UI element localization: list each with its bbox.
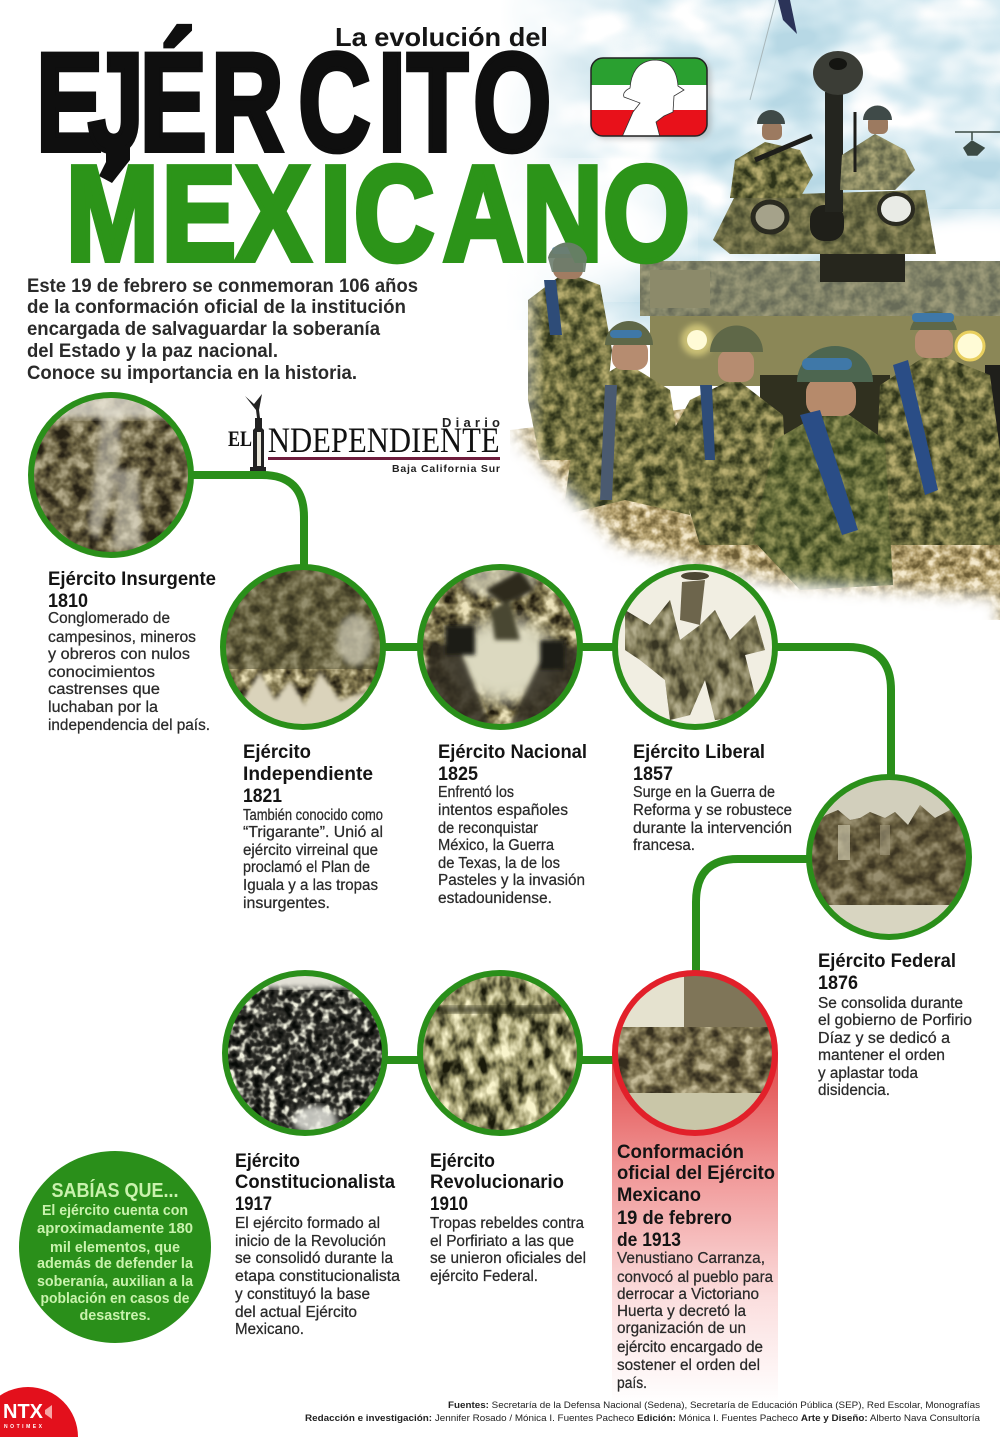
text: Ejército Liberal: Reforma y se robustece: [633, 802, 792, 819]
text: Ejército Federal: 1876: [818, 973, 858, 994]
text: Ejército Liberal: [633, 742, 792, 854]
ground: [510, 400, 1000, 620]
callout: Sabías que: [19, 1151, 211, 1343]
text: Conformación oficial: [617, 1142, 775, 1392]
text: Ejército Constitucionalista: del actual Ejército: [235, 1304, 357, 1321]
text: Ejército Revolucionario: Tropas rebeldes contra: [430, 1215, 584, 1232]
logo: El Independiente: Baja California Sur: [392, 463, 500, 475]
text: Ejército Nacional: México, la Guerra: [438, 837, 554, 854]
text: Ejército Federal: Díaz y se dedicó a: [818, 1030, 950, 1047]
text: Conformación oficial: convocó al pueblo para: [617, 1269, 773, 1286]
photo circle: Ejército Revolucionario: [417, 970, 583, 1136]
text: Ejército Federal: disidencia.: [818, 1082, 890, 1099]
text: Conformación oficial: ejército encargado de: [617, 1339, 763, 1356]
text: Ejército Independiente: También conocido como: [243, 807, 383, 824]
intro text: Este 19 de febrero se conmemoran 106 años: [27, 276, 418, 297]
text: Ejército Revolucionario: 1910: [430, 1194, 468, 1215]
text: Ejército Constitucionalista: El ejército formado al: [235, 1215, 380, 1232]
callout: Sabías que: aproximadamente 180: [37, 1220, 193, 1237]
text: Ejército Revolucionario: el Porfiriato a las que: [430, 1233, 574, 1250]
text: Ejército Constitucionalista: Mexicano.: [235, 1321, 304, 1338]
logo: El Independiente: INDEPENDIENTE: [253, 421, 500, 461]
text: Ejército Liberal: durante la intervención: [633, 820, 792, 837]
intro text: del Estado y la paz nacional.: [27, 341, 278, 362]
text: Ejército Insurgente: independencia del país.: [48, 717, 210, 734]
text: Ejército Liberal: Surge en la Guerra de: [633, 784, 775, 801]
red highlight panel: [612, 1053, 778, 1403]
text: Ejército Federal: mantener el orden: [818, 1047, 945, 1064]
text: Ejército Nacional: 1825: [438, 764, 478, 785]
logo: El Independiente: Diario: [442, 415, 500, 430]
text: Ejército Insurgente: luchaban por la: [48, 699, 158, 716]
text: Ejército Constitucionalista: Constitucionalista: [235, 1172, 395, 1193]
text: Ejército Independiente: 1821: [243, 786, 282, 807]
photo circle: Conformación oficial: [612, 970, 778, 1136]
intro text: encargada de salvaguardar la soberanía: [27, 319, 380, 340]
text: Ejército Insurgente: campesinos, mineros: [48, 629, 196, 646]
tank: [640, 51, 1000, 455]
callout: Sabías que: desastres.: [80, 1307, 150, 1324]
text: Ejército Constitucionalista: Ejército: [235, 1151, 300, 1172]
photo circle: Ejército Constitucionalista: [222, 970, 388, 1136]
text: Conformación oficial: organización de un: [617, 1320, 746, 1337]
text: Conformación oficial: de 1913: [617, 1230, 681, 1251]
text: Ejército Nacional: estadounidense.: [438, 890, 552, 907]
text: Conformación oficial: Venustiano Carranza,: [617, 1250, 765, 1267]
text: Ejército Nacional: de reconquistar: [438, 820, 538, 837]
text: Ejército Constitucionalista: 1917: [235, 1194, 272, 1215]
text: Ejército Nacional: Pasteles y la invasión: [438, 872, 585, 889]
text: Conformación oficial: derrocar a Victoriano: [617, 1286, 759, 1303]
text: Conformación oficial: Huerta y decretó la: [617, 1303, 746, 1320]
credits: Fuentes: Secretaría de la Defensa Nacional (Sedena), Secretaría de Educación Pública (SEP), Red Escolar, Monografías: [448, 1400, 980, 1411]
text: Ejército Insurgente: Ejército Insurgente: [48, 569, 216, 590]
callout: Sabías que: población en casos de: [40, 1290, 190, 1307]
text: Ejército Constitucionalista: se consolidó durante la: [235, 1250, 393, 1267]
flag fragment: [750, 0, 776, 100]
logo: NTX: NTX: [3, 1401, 44, 1423]
photo: soldiers and tank: [490, 0, 1000, 650]
text: Ejército Independiente: Independiente: [243, 764, 373, 785]
rifles: [800, 410, 858, 535]
photo circle: Ejército Insurgente: [28, 392, 194, 558]
text: Ejército Nacional: Ejército Nacional: [438, 742, 587, 763]
text: Ejército Nacional: de Texas, la de los: [438, 855, 560, 872]
text: Ejército Insurgente: [48, 569, 216, 734]
text: Conformación oficial: Conformación: [617, 1142, 744, 1163]
text: Ejército Independiente: [243, 742, 383, 912]
logo: El Independiente: [228, 394, 500, 475]
callout: Sabías que: soberanía, auxilian a la: [37, 1273, 194, 1290]
callout: Sabías que: además de defender la: [37, 1255, 194, 1272]
timeline connector lines: [185, 475, 891, 1060]
text: Ejército Independiente: proclamó el Plan de: [243, 859, 370, 876]
text: Conformación oficial: sostener el orden del: [617, 1357, 760, 1374]
photo circle: Ejército Liberal: [612, 564, 778, 730]
text: Ejército Constitucionalista: [235, 1151, 400, 1338]
text: Ejército Liberal: 1857: [633, 764, 673, 785]
text: Conformación oficial: Mexicano: [617, 1185, 701, 1206]
text: Ejército Independiente: Iguala y a las tropas: [243, 877, 378, 894]
headlights: [681, 324, 713, 356]
credits: [305, 1400, 981, 1424]
text: Ejército Independiente: “Trigarante”. Unió al: [243, 824, 383, 841]
text: Conformación oficial: país.: [617, 1375, 647, 1392]
text: Ejército Revolucionario: Ejército: [430, 1151, 495, 1172]
soldier helmet over title: [548, 242, 587, 272]
intro text: de la conformación oficial de la institución: [27, 297, 406, 318]
credits: Redacción e investigación: Jennifer Rosado / Mónica I. Fuentes Pacheco Edición: Mónica I. Fuentes Pacheco Arte y Diseño: Alberto Nava Consultoría: [305, 1413, 981, 1424]
helmets and faces: [553, 255, 583, 279]
text: Ejército Constitucionalista: etapa constitucionalista: [235, 1268, 400, 1285]
text: Ejército Insurgente: y obreros con nulos: [48, 646, 190, 663]
text: Ejército Liberal: francesa.: [633, 837, 695, 854]
logo: El Independiente: EL: [228, 426, 252, 451]
callout: Sabías que: mil elementos, que: [50, 1239, 180, 1256]
photo circle: Ejército Nacional: [417, 564, 583, 730]
callout: Sabías que: SABÍAS QUE...: [52, 1179, 178, 1202]
text: Ejército Revolucionario: [430, 1151, 586, 1285]
text: Ejército Insurgente: castrenses que: [48, 681, 160, 698]
text: Ejército Federal: y aplastar toda: [818, 1065, 918, 1082]
icon: flag with soldier profile: [591, 58, 711, 139]
text: Conformación oficial: 19 de febrero: [617, 1208, 732, 1229]
text: Ejército Insurgente: conocimientos: [48, 664, 155, 681]
text: Ejército Independiente: insurgentes.: [243, 895, 330, 912]
photo circle: Ejército Federal: [806, 774, 972, 940]
photo circle: Ejército Independiente: [220, 564, 386, 730]
logo: NTX: [0, 1387, 78, 1437]
text: Ejército Independiente: Ejército: [243, 742, 311, 763]
intro text: Conoce su importancia en la historia.: [27, 363, 357, 384]
title: la evolución del: La evolución del: [335, 22, 548, 52]
soldiers on tank: [730, 105, 915, 198]
text: Ejército Liberal: Ejército Liberal: [633, 742, 765, 763]
text: Ejército Revolucionario: Revolucionario: [430, 1172, 564, 1193]
text: Ejército Revolucionario: se unieron oficiales del: [430, 1250, 586, 1267]
text: Ejército Insurgente: 1810: [48, 591, 88, 612]
text: Conformación oficial: oficial del Ejército: [617, 1163, 775, 1184]
text: Ejército Nacional: [438, 742, 587, 907]
logo: NTX: NOTIMEX: [4, 1424, 43, 1430]
intro text: [27, 276, 418, 384]
title: Ejército: EJÉRCITO: [36, 24, 551, 180]
text: Ejército Constitucionalista: inicio de la Revolución: [235, 1233, 386, 1250]
text: Ejército Federal: Ejército Federal: [818, 951, 956, 972]
title: Mexicano: MEXICANO: [66, 139, 690, 289]
helicopter: [955, 132, 1000, 155]
soldiers in front: [528, 242, 1000, 590]
text: Ejército Nacional: intentos españoles: [438, 802, 568, 819]
text: Ejército Federal: Se consolida durante: [818, 995, 963, 1012]
photo fade: [490, 420, 1000, 650]
text: Ejército Federal: el gobierno de Porfirio: [818, 1012, 972, 1029]
text: Ejército Constitucionalista: y constituyó la base: [235, 1286, 370, 1303]
text: Ejército Nacional: Enfrentó los: [438, 784, 514, 801]
text: Ejército Revolucionario: ejército Federal.: [430, 1268, 538, 1285]
text: Ejército Federal: [818, 951, 972, 1099]
text: Ejército Insurgente: Conglomerado de: [48, 610, 170, 627]
text: Ejército Independiente: ejército virreinal que: [243, 842, 378, 859]
callout: Sabías que: El ejército cuenta con: [42, 1202, 188, 1219]
